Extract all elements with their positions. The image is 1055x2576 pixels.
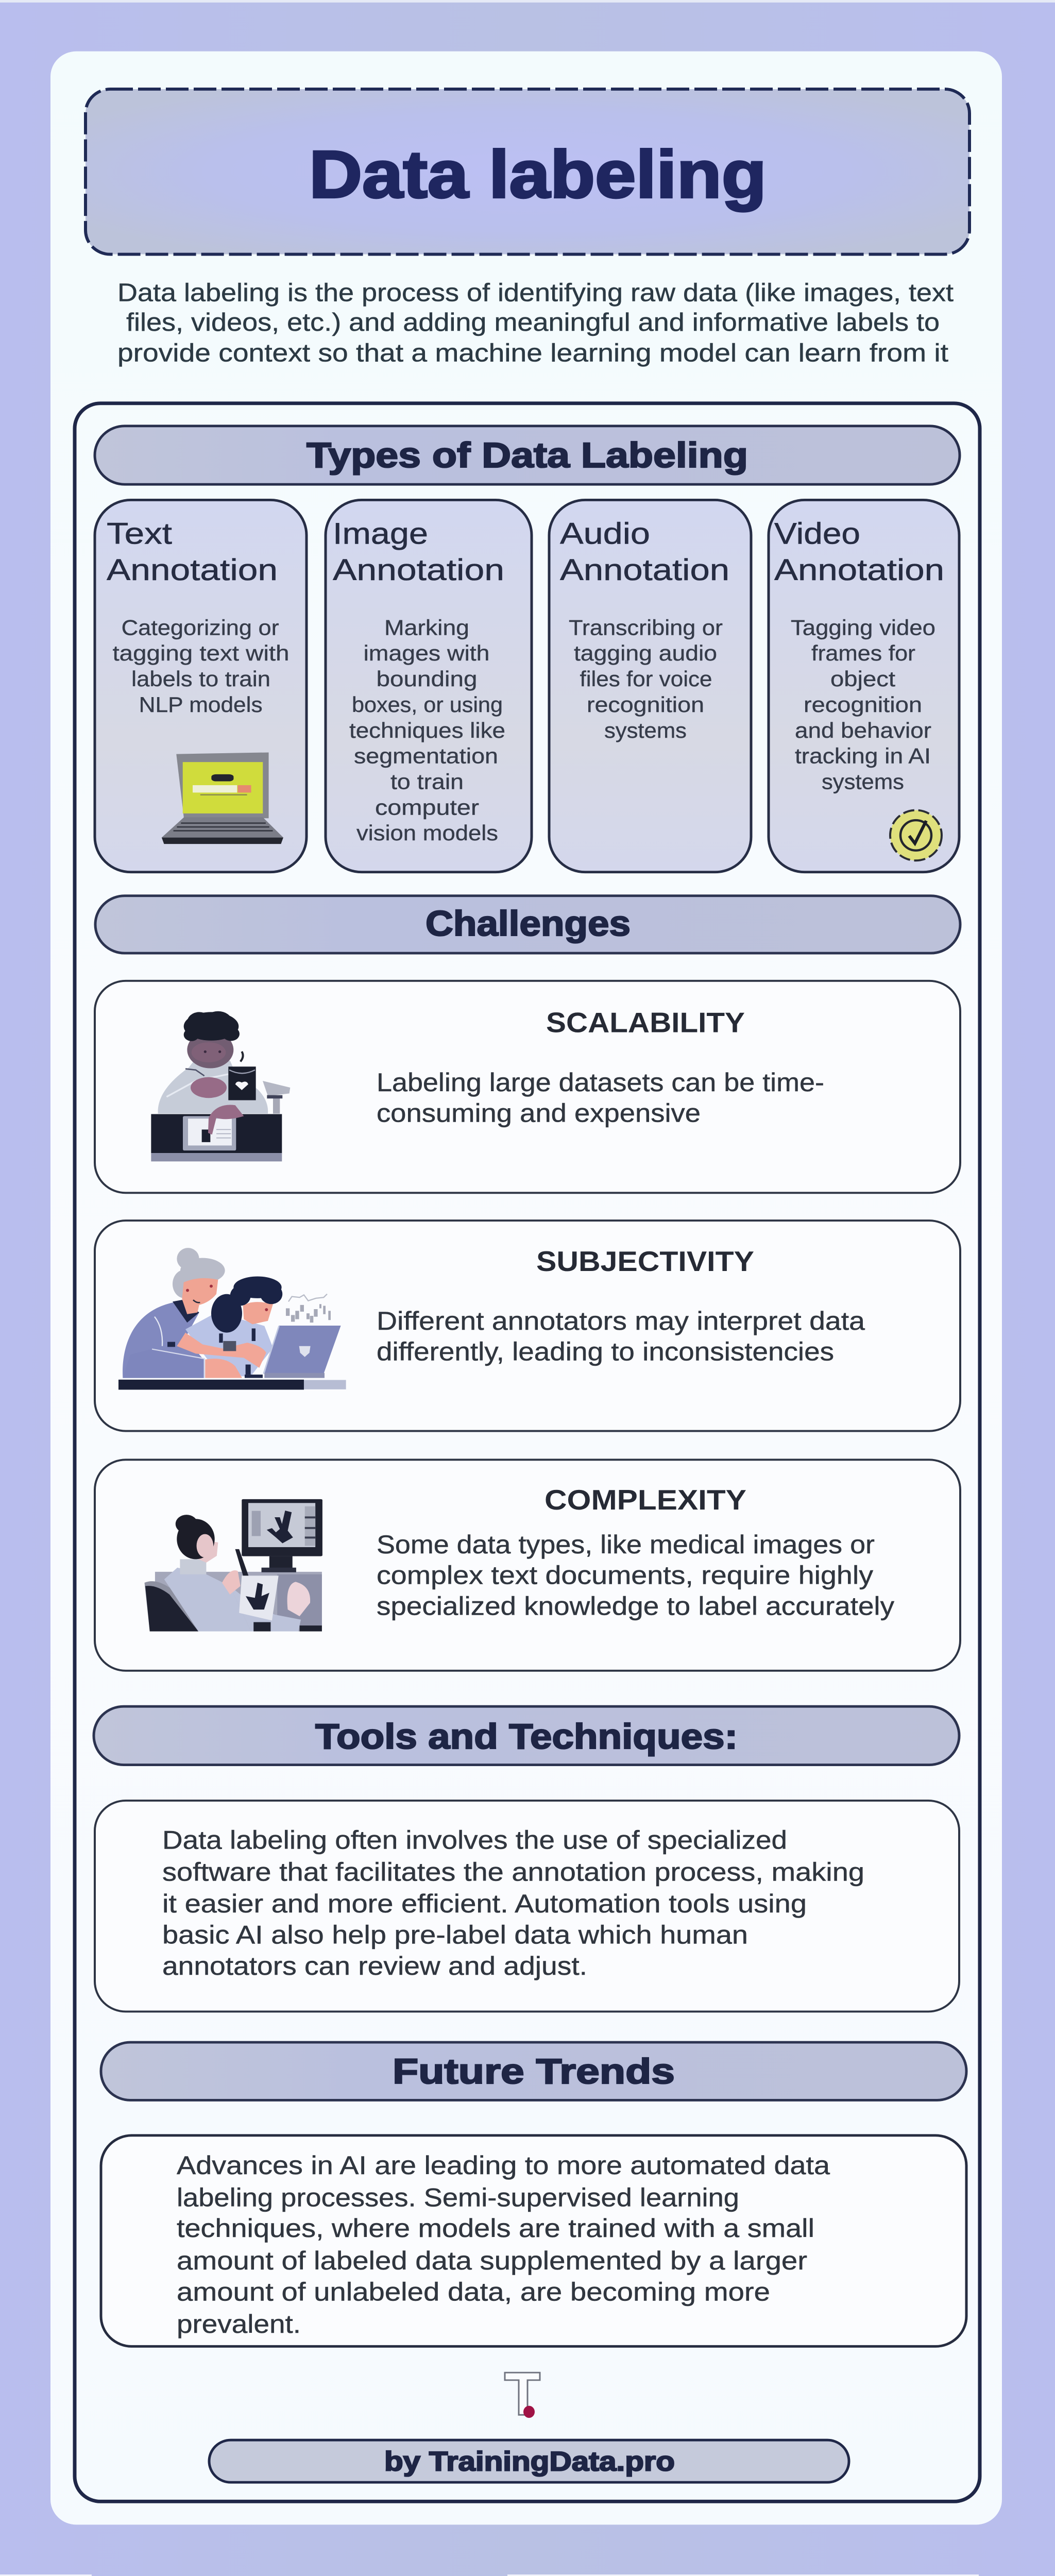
panel: subjectivity: Different annotators may interpret data bbox=[377, 1307, 865, 1335]
panel: complexity bbox=[95, 1460, 960, 1671]
main panel bbox=[75, 403, 980, 2501]
panel: scalability: consuming and expensive bbox=[377, 1098, 701, 1127]
panel: audio annotation: systems bbox=[604, 719, 687, 743]
icon: T logo bbox=[505, 2372, 540, 2418]
panel: video annotation: frames for bbox=[811, 642, 915, 666]
footer pill: by TrainingData.pro bbox=[384, 2447, 675, 2477]
panel: complexity: COMPLEXITY bbox=[544, 1484, 746, 1516]
panel: image annotation: to train bbox=[390, 770, 464, 794]
panel: image annotation: Image bbox=[333, 516, 428, 550]
panel: image annotation: techniques like bbox=[349, 719, 505, 743]
panel: image annotation: images with bbox=[364, 642, 489, 666]
panel: audio annotation: tagging audio bbox=[574, 642, 717, 666]
panel: future text: amount of unlabeled data, are becoming more bbox=[177, 2277, 770, 2306]
panel: video annotation: and behavior bbox=[795, 719, 931, 743]
panel: audio annotation: Transcribing or bbox=[569, 616, 723, 640]
panel: video annotation: systems bbox=[822, 770, 904, 794]
panel: complexity: specialized knowledge to label accurately bbox=[377, 1591, 895, 1620]
panel: subjectivity: differently, leading to inconsistencies bbox=[377, 1337, 834, 1366]
panel: image annotation: Annotation bbox=[333, 553, 504, 587]
panel: text annotation: Text bbox=[107, 516, 173, 550]
panel: tools text: it easier and more efficient. Automation tools using bbox=[162, 1889, 807, 1918]
heading: challenges bbox=[95, 896, 960, 953]
panel: tools text: Data labeling often involves the use of specialized bbox=[162, 1825, 787, 1855]
panel: complexity: complex text documents, require highly bbox=[377, 1561, 874, 1590]
heading: challenges: Challenges bbox=[426, 904, 631, 943]
panel: scalability bbox=[95, 981, 960, 1193]
panel: future text: prevalent. bbox=[177, 2309, 301, 2338]
illustration: designer with tablet and monitor bbox=[145, 1499, 322, 1631]
panel: audio annotation bbox=[549, 500, 751, 872]
panel: image annotation: computer bbox=[375, 796, 479, 820]
panel: image annotation: segmentation bbox=[354, 744, 498, 769]
panel: future text: techniques, where models are trained with a small bbox=[177, 2214, 814, 2243]
illustration: two people at a laptop bbox=[118, 1248, 346, 1389]
panel: tools text bbox=[95, 1801, 959, 2011]
panel: text annotation: labels to train bbox=[131, 668, 270, 691]
panel: text annotation bbox=[95, 500, 307, 872]
panel: image annotation: bounding bbox=[376, 668, 478, 691]
icon: laptop bbox=[162, 752, 283, 844]
white edge strip top bbox=[0, 0, 1055, 3]
panel: text annotation: Annotation bbox=[107, 553, 278, 587]
panel: audio annotation: files for voice bbox=[580, 668, 712, 691]
panel: video annotation: Tagging video bbox=[791, 616, 935, 640]
white edge strips bottom bbox=[0, 2574, 979, 2576]
title banner bbox=[86, 89, 969, 255]
intro text bbox=[117, 279, 954, 367]
footer pill bbox=[209, 2440, 849, 2482]
panel: image annotation: Marking bbox=[384, 616, 469, 640]
panel: image annotation bbox=[326, 500, 532, 872]
panel: audio annotation: recognition bbox=[587, 693, 704, 717]
panel: tools text: annotators can review and adjust. bbox=[162, 1952, 587, 1980]
heading: future trends bbox=[101, 2042, 966, 2100]
panel: scalability: Labeling large datasets can be time- bbox=[377, 1067, 824, 1097]
panel: future text: Advances in AI are leading to more automated data bbox=[177, 2151, 830, 2180]
panel: text annotation: Categorizing or bbox=[122, 616, 279, 640]
illustration: person with coffee at tablet bbox=[151, 1011, 290, 1161]
panel: future text: amount of labeled data supplemented by a larger bbox=[177, 2246, 807, 2275]
panel: audio annotation: Annotation bbox=[560, 553, 729, 587]
panel: complexity: Some data types, like medical images or bbox=[377, 1530, 875, 1559]
heading: future trends: Future Trends bbox=[393, 2052, 675, 2091]
panel: subjectivity bbox=[95, 1221, 960, 1431]
panel: video annotation bbox=[769, 500, 959, 872]
heading: tools and techniques bbox=[94, 1706, 959, 1765]
panel: text annotation: tagging text with bbox=[112, 642, 289, 666]
intro text: files, videos, etc.) and adding meaningful and informative labels to bbox=[126, 309, 940, 336]
heading: types of data labeling bbox=[95, 426, 960, 484]
panel: tools text: software that facilitates the annotation process, making bbox=[162, 1857, 864, 1886]
panel: video annotation: object bbox=[830, 668, 895, 691]
panel: video annotation: recognition bbox=[804, 693, 922, 717]
heading: types of data labeling: Types of Data Labeling bbox=[307, 435, 748, 475]
panel: video annotation: tracking in AI bbox=[795, 744, 931, 769]
panel: subjectivity: SUBJECTIVITY bbox=[536, 1245, 754, 1277]
panel: video annotation: Annotation bbox=[774, 553, 944, 587]
panel: image annotation: boxes, or using bbox=[352, 693, 503, 717]
panel: future text bbox=[101, 2136, 966, 2346]
panel: tools text: basic AI also help pre-label data which human bbox=[162, 1920, 748, 1949]
icon: check badge bbox=[890, 810, 942, 860]
intro text: provide context so that a machine learning model can learn from it bbox=[117, 339, 948, 367]
panel: scalability: SCALABILITY bbox=[546, 1007, 745, 1038]
panel: future text: labeling processes. Semi-supervised learning bbox=[177, 2183, 739, 2212]
panel: text annotation: NLP models bbox=[139, 693, 263, 717]
title banner: Data labeling bbox=[309, 137, 767, 212]
panel: audio annotation: Audio bbox=[560, 516, 650, 550]
intro text: Data labeling is the process of identifying raw data (like images, text bbox=[117, 279, 954, 307]
panel: image annotation: vision models bbox=[356, 822, 498, 845]
heading: tools and techniques: Tools and Techniques: bbox=[315, 1717, 738, 1756]
panel: video annotation: Video bbox=[774, 516, 860, 550]
